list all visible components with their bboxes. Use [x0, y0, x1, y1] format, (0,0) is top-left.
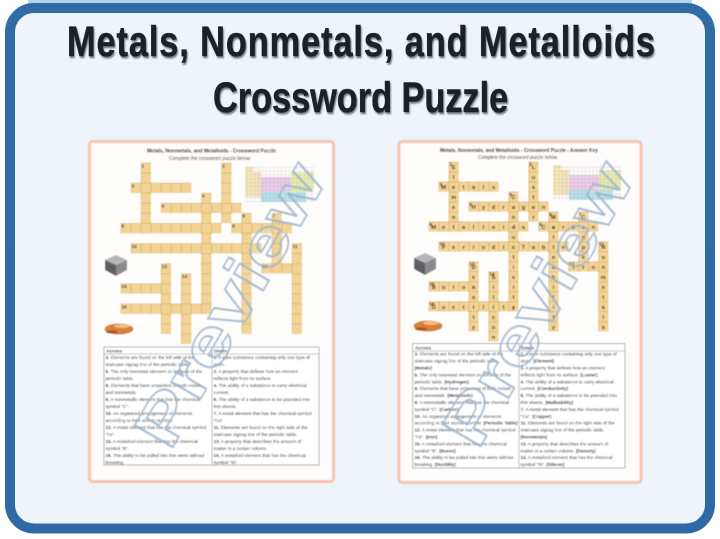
- clue table: "Cu".: [214, 418, 224, 423]
- answer clue table: 9. A nonmetallic element that has the chemical: [414, 400, 509, 405]
- answer clue table: 11. Elements are found on the right side of the: [520, 421, 615, 426]
- clue table: [104, 347, 319, 465]
- clue table: 11. Elements are found on the right side of the: [214, 425, 308, 430]
- clue table: 6. The ability of a substance to be pounded into: [214, 397, 310, 402]
- clue table: according to their atomic number.: [106, 418, 173, 423]
- clue table: symbol "C".: [106, 404, 129, 409]
- answer clue table: 8. Elements that have properties of both metals: [414, 386, 511, 391]
- clue table: thin sheets.: [214, 404, 237, 409]
- clue table: 10. An organized arrangement of elements: [106, 411, 193, 416]
- answer clue table: breaking. (Ductility): [414, 462, 456, 467]
- answer clue table: symbol "C". (Carbon): [414, 407, 459, 412]
- answer clue table: matter in a certain volume. (Density): [520, 448, 596, 453]
- top edge glow: [28, 0, 692, 5]
- clue table: and nonmetals.: [106, 390, 137, 395]
- answer clue table: 12. A metal element that has the chemical symbol: [414, 428, 515, 433]
- answer clue table: symbol "B". (Boron): [414, 448, 456, 453]
- icon: metal cube: [414, 253, 436, 275]
- clue table: breaking.: [106, 460, 124, 465]
- answer clue table: and nonmetals. (Metalloids): [414, 393, 473, 398]
- clue table: 1. A pure substance containing only one type of: [214, 355, 311, 360]
- icon: copper: [104, 324, 134, 334]
- clue table: atom.: [214, 362, 225, 367]
- answer clue table: 7. A metal element that has the chemical symbol: [520, 407, 619, 412]
- answer clue table: "Cu". (Copper): [520, 414, 552, 419]
- clue table: 3. Elements are found on the left side of the: [106, 355, 195, 360]
- clue table: 4. The ability of a substance to carry electrical: [214, 383, 307, 388]
- icon: periodic table: [245, 167, 314, 202]
- worksheet heading: Metals, Nonmetals, and Metalloids - Crossword Puzzle: [147, 148, 276, 154]
- answer clue table: staircase zigzag line of the periodic table.: [414, 359, 499, 364]
- answer clue table: Across: [415, 346, 432, 352]
- clue table: staircase zigzag line of the periodic table.: [106, 362, 190, 367]
- worksheet page: [90, 142, 334, 482]
- answer instruction: Complete the crossword puzzle below.: [478, 155, 558, 161]
- answer heading: Metals, Nonmetals, and Metalloids - Crossword Puzzle - Answer Key: [440, 148, 598, 154]
- title: Crossword Puzzle: [213, 74, 508, 122]
- answer clue table: current. (Conductivity): [520, 386, 569, 391]
- clue table: 13. A property that describes the amount of: [214, 439, 302, 444]
- answer clue table: 13. A property that describes the amount of: [520, 441, 609, 446]
- answer clue table: (Nonmetals): [520, 434, 548, 440]
- answer clue table: thin sheets. (Malleability): [520, 400, 574, 405]
- clue table: Down: [214, 348, 227, 354]
- clue table: 7. A metal element that has the chemical symbol: [214, 411, 312, 416]
- clue table: 9. A nonmetallic element that has the chemical: [106, 397, 200, 402]
- answer clue table: atom. (Element): [520, 359, 555, 364]
- clue table: matter in a certain volume.: [214, 446, 268, 451]
- clue table: Across: [106, 348, 123, 354]
- answer clue table: 15. A metalloid element that has the chemical: [414, 441, 507, 446]
- clue table: 14. A metalloid element that has the chemical: [214, 453, 306, 458]
- clue table: symbol "Si".: [214, 460, 238, 465]
- answer clue table: (Metals): [414, 366, 432, 370]
- answer clue table: staircase zigzag line of the periodic table.: [520, 428, 605, 433]
- answer clue table: periodic table. (Hydrogen): [414, 379, 469, 384]
- clue table: 8. Elements that have properties of both metals: [106, 383, 202, 388]
- answer clue table: 3. Elements are found on the left side of the: [414, 352, 504, 357]
- clue table: "Fe".: [106, 432, 115, 437]
- answer clue table: Down: [521, 346, 534, 352]
- panel: blank crossword worksheet: [90, 142, 340, 482]
- clue table: symbol "B".: [106, 446, 129, 451]
- answer clue table: 10. An organized arrangement of elements: [414, 414, 502, 419]
- icon: metal cube: [105, 255, 127, 276]
- title: [67, 18, 655, 122]
- clue table: 5. The only nonmetal element on left side of the: [106, 369, 203, 374]
- solved crossword grid: [429, 162, 608, 341]
- clue table: 15. A metalloid element that has the chemical: [106, 439, 198, 444]
- crossword grid: [121, 163, 302, 344]
- answer clue table: 6. The ability of a substance to be pounded into: [520, 393, 617, 398]
- icon: copper: [414, 320, 442, 332]
- panel: answer key worksheet: [399, 142, 648, 482]
- answer clue table: 5. The only nonmetal element on left side of the: [414, 372, 512, 377]
- answer clue table: 1. A pure substance containing only one type of: [520, 352, 618, 357]
- clue table: staircase zigzag line of the periodic table.: [214, 432, 298, 437]
- answer clue table: 14. A metalloid element that has the chemical: [520, 455, 613, 460]
- watermark: Preview: [120, 150, 340, 459]
- answer page: [399, 142, 641, 482]
- clue table: 16. The ability to be pulled into thin wires without: [106, 453, 205, 458]
- answer clue table: 4. The ability of a substance to carry electrical: [520, 379, 614, 384]
- title: Metals, Nonmetals, and Metalloids: [67, 18, 655, 66]
- clue table: reflects light from its surface.: [214, 376, 272, 381]
- answer clue table: symbol "Si". (Silicon): [520, 462, 565, 467]
- answer clue table: 2. A property that defines how an element: [520, 366, 606, 370]
- clue table: periodic table.: [106, 376, 134, 381]
- answer clue table: reflects light from its surface. (Luster): [520, 372, 598, 377]
- answer clue table: according to their atomic number. (Periodic Table): [414, 421, 518, 426]
- clue table: current.: [214, 390, 229, 395]
- icon: periodic table: [553, 165, 621, 200]
- clue table: 12. A metal element that has the chemical symbol: [106, 425, 206, 430]
- worksheet instruction: Complete the crossword puzzle below.: [169, 156, 251, 162]
- watermark: Preview: [428, 149, 648, 458]
- answer clue table: [413, 344, 625, 468]
- answer clue table: 16. The ability to be pulled into thin wires without: [414, 455, 514, 460]
- answer clue table: "Fe". (Iron): [414, 434, 438, 440]
- clue table: 2. A property that defines how an element: [214, 369, 299, 374]
